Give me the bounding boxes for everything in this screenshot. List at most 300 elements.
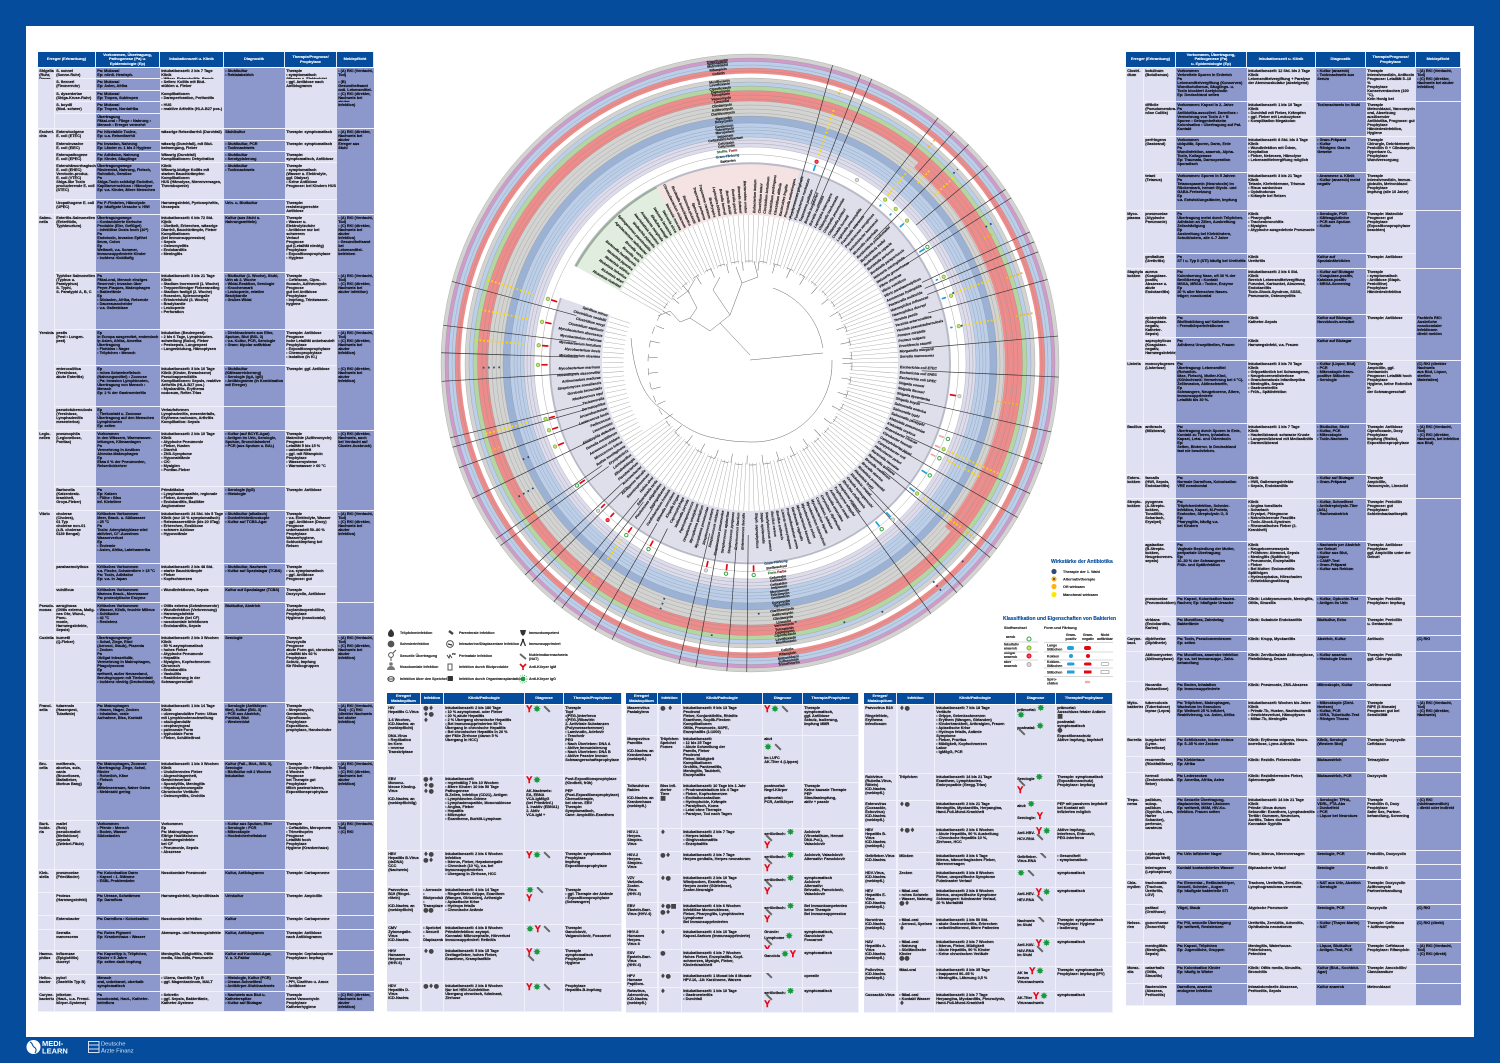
- row: Streptokokken agalactiae: Prophylaxe: [1367, 547, 1388, 551]
- species labels: left half: Aggregatibacter: [648, 485, 667, 511]
- row: Salmonella Typhi: • Südasien, Afrika, Reisende: [97, 298, 148, 302]
- row: Enteropathogene E. coli: Therapie:: [286, 153, 303, 157]
- species labels: right half: Klebsiella pneumoniae: [889, 416, 925, 434]
- row: Streptokokken pyogenes: Schleimhautantiseptik: [1367, 512, 1408, 516]
- row: Salmonella Typhi: Tod): [338, 278, 346, 282]
- row: Helicobacter: [38, 975, 374, 992]
- row: Mumpsvirus: Im LUFC: [764, 756, 780, 760]
- species labels: right half: Fusobacterium nucleatum: [793, 178, 811, 221]
- row: HSV-1: DNA-Pol.),: [804, 838, 823, 842]
- ring labels: bottom: Tigecyclin: [773, 602, 790, 608]
- row: Shigella: Inkubationszeit: 2 bis 7 Tage: [161, 69, 213, 73]
- species labels: left half: Erysipelothrix: [608, 448, 630, 466]
- row: Clostridium botulinum: Wundbotulismus, Säuglings- u.: [1177, 85, 1234, 89]
- row: Burkholderia: Hygiene (Krankenhaus): [286, 846, 329, 850]
- row: HIV: PEG: [565, 738, 573, 742]
- row: Borrelia hermsii: [1126, 773, 1461, 797]
- row: HDV Virus: symptomatisch: [1057, 871, 1085, 875]
- row: Clostridium botulinum: Therapie: [1367, 69, 1383, 73]
- row: Parvovirus: Inkubationszeit: 4 bis 14 Tage: [445, 888, 499, 892]
- row: Burkholderia: Vorkommen: [161, 822, 183, 826]
- row: Enterotoxigene E. coli: • (A) RKI (direkter,: [338, 130, 371, 134]
- row: Streptokokken agalactiae: • Neugeborenensepsis: [1248, 547, 1289, 551]
- row: Salmonella Typhi: • Bakteriämie: [97, 290, 121, 294]
- species labels: right half: Moraxella catarrhalis: [852, 228, 879, 256]
- row: HBV Hepatitis: Aktive Impfung,: [1057, 828, 1086, 832]
- species labels: left half: Rickettsia japonica: [606, 249, 634, 271]
- row: Vibrio cholerae: 01 Typ: [56, 520, 68, 524]
- table header: Klinik/Pathologie: [959, 695, 991, 700]
- species labels: left half: [557, 181, 748, 556]
- row: HIV: (meldepflicht): [388, 726, 413, 730]
- row: Streptokokken agalactiae: • Kultur aus Blut,: [1317, 551, 1348, 555]
- row: Haemophilus: Ep: selten dank Impfung: [97, 960, 141, 964]
- row: Borrelien: borreliose, Lyme-Arthritis: [1248, 742, 1294, 746]
- row: EBV: Chemotherapie,: [565, 797, 594, 801]
- species labels: right half: Staph. epidermidis: [759, 512, 766, 544]
- row: Neisserien meningitidis: • Antigen-Test, PCR: [1317, 948, 1352, 952]
- row: Masernvirus: ● ♦: [660, 705, 673, 712]
- row: Yersinia pestis: • 2 bis 6 Tage, Lymphknoten-: [161, 335, 213, 339]
- species labels: left half: Aerococcus viridans: [588, 435, 621, 457]
- row: Streptokokken pyogenes: • Erysipel, Phlegmone: [1248, 512, 1288, 516]
- species labels: right half: Haemophilus influenzae: [890, 295, 929, 313]
- row: Bacillus: • Lungenmilzbrand mit Mediastinitis: [1248, 437, 1313, 441]
- row: Francisella: • okuloglandulär: [161, 720, 191, 724]
- form and staining column: Kokken-: [1047, 660, 1060, 664]
- row: Salmonella Typhi: S. Paratyphi A, B, C: [56, 290, 92, 294]
- row: Clostridium tetani: tetani: [1145, 174, 1155, 178]
- row: Enteroinvasive E. coli: • Toxinnachweis: [225, 146, 255, 150]
- row: Mykobakterien tuberculosis: • IGRA, Tuberkulin-Test: [1317, 713, 1359, 717]
- row: Legionella: Pa: [97, 444, 102, 448]
- row: Rubivirus: Tröpfchen: [899, 775, 918, 779]
- row: Aktinomyceten: [1126, 652, 1461, 682]
- row: Clostridium perfringens: ubiquitär, Sporen, Darm, Erde: [1177, 142, 1231, 146]
- row: Francisella: Klinik: [161, 708, 172, 712]
- row: HDV Hepatitis D: Übergang chronisch, fulminant,: [445, 992, 502, 996]
- row: Corynebacterium: Katheterspitze: [225, 997, 251, 1001]
- form and staining column: Spiro-: [1047, 678, 1057, 682]
- row: Pseudomonas aeruginosa: • Wundinfektion (Verbrennung): [161, 608, 217, 612]
- row: Enteropathogene E. coli: • Stuhlkultur: [225, 153, 248, 157]
- row: HIV: • Aktive Passive Immun: [565, 754, 608, 758]
- row: Corynebacterium: • ggf. Sepsis, Bakteriämie,: [161, 997, 209, 1001]
- row: Yersinia enterocolitica: • Myokarditis, Erythema: [161, 387, 204, 391]
- row: Clostridium perfringens: Chirurgie, Debridement: [1367, 142, 1409, 146]
- row: Tollwutvirus: ■: [660, 795, 666, 802]
- row: Uropathogene E. coli: Ep: häufigste Ursache v. HWI: [97, 205, 150, 209]
- row: Vibrio cholerae: Nachweis bei akuter: [338, 524, 362, 532]
- row: Treponema: infektion. Frauen selten: [1177, 810, 1220, 814]
- row: Shigella flexneri: [38, 79, 374, 91]
- row: Norovirus: Nachweis: [1017, 919, 1035, 923]
- row: Neisserien meningitidis: • (C) RKI (direkt): [1417, 952, 1446, 956]
- row: Staphylokokken saprophyticus: (Koagulase-: [1145, 343, 1167, 347]
- row: Treponema: • (C) RKI (nichtnamentlich): [1417, 798, 1449, 806]
- row: Corynebacterium: Nachweis bei akuter: [338, 997, 362, 1005]
- row: Enterobacter: Pa: Darmflora • Kolonisation: [97, 917, 149, 921]
- icon: antibody IgG: [519, 675, 556, 683]
- species labels: left half: Rickettsia rickettsii: [592, 269, 622, 289]
- row: Bartonella: krankheit,: [56, 496, 74, 500]
- row: HSV-1: • Herpes labialis: [683, 834, 712, 838]
- row: Yersinia pestis: Ep: [97, 331, 102, 335]
- species labels: right half: Vibrio cholerae: [878, 273, 902, 289]
- ring labels: bottom: Imipenem: [771, 584, 787, 590]
- row: Yersinia enterocolitica: Nachweis bei akuter: [338, 371, 362, 379]
- row: HBV: ●♦: [423, 857, 434, 864]
- row: Yersinia pestis: • v.a. Kultur, PCR, Serologie: [225, 339, 275, 343]
- row: VZV: Windpocken, Exanthem,: [683, 880, 727, 884]
- row: Vibrio parahaemolyticus: • Kopfschmerzen: [161, 577, 192, 581]
- row: VZV: [626, 875, 859, 903]
- icon: nosocomial infection: [387, 662, 438, 670]
- row: Parvovirus B19: Aktive Impfung, Impfstoff: [1057, 738, 1103, 742]
- row: Mumpsvirus: [626, 736, 859, 783]
- row: EBV: EBV: [388, 777, 396, 781]
- row: EBV: Post-Expositionsprophylaxe: [565, 777, 616, 781]
- row: Brucella: (Brucellosen,: [56, 774, 80, 778]
- ring labels: bottom: Gentamicin: [771, 594, 790, 600]
- row: Treponema: Sekundär: Exanthem, Lymphadenitis: [1248, 810, 1315, 814]
- row: Bacillus: Impfung (Risiko),: [1367, 437, 1398, 441]
- row: Burkholderia: • Abszesse: [161, 850, 181, 854]
- row: Klebsiella: [38, 870, 374, 893]
- wordmark: LEARN: [42, 1046, 68, 1056]
- ring labels: bottom: Rifampicin: [779, 650, 797, 657]
- species labels: left half: Gemella morbillorum: [585, 431, 618, 451]
- row: Clostridium perfringens: Ep: Traumata, Darmoperation: [1177, 158, 1230, 162]
- ring labels: top: Gram-Färbung: [716, 153, 739, 159]
- row: Yersinia pestis: in Asien, Afrika, Amerika: [97, 339, 142, 343]
- row: Aktinomyceten: • Kultur anaerob: [1317, 653, 1347, 657]
- row: Enterohämorrhagische E. coli: Rindermist, Nahrung, Fleisch,: [97, 168, 151, 172]
- row: Brucella: cella: [39, 766, 48, 770]
- row: Mycoplasma pneumoniae: Ausbreitung bei Kleinkindern,: [1177, 232, 1231, 236]
- row: Parvovirus: • Expositionsprophylaxe: [565, 896, 609, 900]
- species labels: right half: Shigella flexneri: [898, 386, 926, 395]
- row: Treponema: nema: [1127, 802, 1137, 806]
- row: Bacteroides: Metronidazol: [1367, 985, 1391, 989]
- species labels: left half: Ehrlichia ewingii: [650, 214, 669, 240]
- row: Neisserien meningitidis: meningitidis: [1145, 944, 1168, 948]
- row: Coxiella burnetii: Inkubationszeit: 2 bis 3 Wochen: [161, 636, 219, 640]
- row: Bacillus: Kapsel, Letal- und Ödemtoxin: [1177, 437, 1231, 441]
- ring labels: top: Cefotaxim: [718, 140, 735, 146]
- row: Moraxella: Clavulansäure: [1367, 970, 1393, 974]
- row: Vibrio cholerae: Pa: [97, 524, 102, 528]
- row: HHV-6: HHV: [388, 949, 396, 953]
- row: HSV-1: (Virostatikum, Hemmt: [804, 834, 843, 838]
- row: Neisserien meningitidis: • Liquor, Blutkultur: [1317, 944, 1351, 948]
- row: Enteropathogene E. coli: • Serotypisierung: [225, 157, 256, 161]
- row: Salmonella enterica: (bei Immunsuppression): [161, 236, 205, 240]
- row: Treponema: Therapie: [1367, 798, 1383, 802]
- row: Legionella: • Fieber, Husten: [161, 444, 190, 448]
- row: Mycoplasma pneumoniae: Übertragung meist durch Tröpfchen.: [1177, 216, 1243, 220]
- row: Parvovirus: • ggf. Therapie der Anämie: [565, 892, 613, 896]
- row: Streptokokken pyogenes: • Angina tonsillaris: [1248, 504, 1282, 508]
- row: HDV Virus: (meldepfl.): [865, 879, 884, 883]
- row: Staphylokokken aureus: • Antibiose (Staph-Penicilline): [1367, 278, 1401, 286]
- row: Parvovirus: röteln): [388, 896, 400, 900]
- logo: MEDI-LEARN: [26, 1039, 68, 1056]
- row: Chlamydien trachomatis: • Serologie: [1317, 885, 1337, 889]
- row: EBV: VCA-IgM +: [526, 813, 545, 817]
- row: Parvovirus B19: • Erythem (Wangen, Girlanden): [936, 718, 992, 722]
- ring labels: bottom: Ciprofloxacin: [774, 631, 796, 638]
- species labels: right half: Gardnerella vaginalis: [790, 506, 804, 542]
- ring labels: top: Clarithromycin: [711, 110, 735, 117]
- row: Clostridium tetani: Impfung (alle 10 Jahre): [1367, 190, 1409, 194]
- row: Parvovirus B19: • Grippe, Gelenkschmerzen: [936, 714, 985, 718]
- row: Treponema: Tertiär: Gummen, Neurolues,: [1248, 814, 1300, 818]
- row: Tollwutvirus: zierter Tiere: [660, 788, 672, 796]
- row: Francisella: prophylaxe, Handschuhe: [286, 728, 331, 732]
- row: Listeria: • Kultur (Liquor, Blut): [1317, 362, 1355, 366]
- row: HBV: • Chronisch (10 %), v.a. bei: [445, 864, 493, 868]
- row: Streptokokken agalactiae: • Frühform: Atemnot, Sepsis: [1248, 551, 1299, 555]
- row: Streptokokken pyogenes: (ASL): [1317, 508, 1327, 512]
- row: Clostridium tetani: Inkubationszeit: 3 bis 21 Tage: [1248, 174, 1302, 178]
- row: Brucella: Prophylaxe: [286, 782, 307, 786]
- row: HBV: • Übergang in Zirrhose, HCC: [445, 872, 496, 876]
- row: Staphylokokken aureus: Furunkel, Karbunkel, Abszesse,: [1248, 282, 1305, 286]
- row: Francisella: • ulzeroglanduläre Form: Ulkus: [161, 712, 217, 716]
- row: CMV: Inkubationszeit: 4 bis 8 Wochen: [445, 926, 503, 930]
- row: HAV: HAV: [865, 940, 873, 944]
- table header: Diagnose: [1027, 695, 1044, 700]
- row: Leptospira interrogans: Biphasischer Verlauf: [1248, 866, 1286, 870]
- row: Borrelia recurrentis: (Rückfallfieber): [1145, 762, 1173, 766]
- row: Pseudomonas aeruginosa: monas: [39, 608, 51, 612]
- row: Vibrio parahaemolyticus: • starke Bauchkrämpfe: [161, 569, 202, 573]
- row: Enterokokken: (HWI, Sepsis,: [1145, 480, 1169, 484]
- row: Mykobakterien tuberculosis: Prognose: gut bei: [1367, 709, 1399, 713]
- row: Corynebacterium diphtheriae: diphtheriae: [1145, 637, 1166, 641]
- icon: sexual transmission: [389, 650, 437, 661]
- row: Enterohämorrhagische E. coli: Pa: [97, 176, 102, 180]
- row: Salmonella enterica: Kultur (aus Stuhl u. Nahrungsmitteln): [225, 216, 260, 224]
- row: Rotavirus: Adenovirus,: [627, 993, 649, 997]
- row: Tollwutvirus: PEP: [804, 792, 812, 796]
- row: Streptokokken agalactiae: sepsis): [1145, 559, 1158, 563]
- row: Proteus: Urinkultur: [225, 894, 243, 898]
- row: VZV: Virus: [627, 888, 637, 892]
- row: Clostridium tetani: Pa: [1177, 178, 1182, 182]
- row: Chlamydophila psittaci: psittaci: [1145, 906, 1158, 910]
- row: Bacillus: [1126, 424, 1461, 475]
- row: Helicobacter: bacter: [39, 980, 51, 984]
- species labels: left half: Bordetella bronchiseptica: [671, 185, 692, 226]
- row: Staphylokokken saprophyticus: Adhärenz Uroepithelien, Frauen: [1177, 343, 1235, 347]
- row: Bartonella: Oroya-Fieber): [56, 500, 81, 504]
- row: Moraxella: Therapie: Amoxicillin/: [1367, 966, 1407, 970]
- row: Clostridium tetani: Tetanospasmin (Neurotoxin) im: [1177, 182, 1234, 186]
- table header: Infektion: [424, 695, 440, 700]
- row: HBV: Infektion: [445, 856, 461, 860]
- row: Coxiella burnetii: Phagolysosom: [97, 664, 124, 668]
- row: Haemophilus: media, Sinusitis, Pneumonie: [161, 956, 213, 960]
- row: Treponema: (Syphilis, Lues,: [1145, 810, 1173, 814]
- row: Francisella: Tod) • (C) RKI: [338, 708, 362, 712]
- row: Bartonella: • Flöhe • Biss: [97, 496, 121, 500]
- row: Clostridium perfringens: Prophylaxe: [1367, 154, 1388, 158]
- row: Legionella: • CK↑: [161, 460, 171, 464]
- row: Clostridium tetani: Tetanie, Kieferklemme, Trismus: [1248, 182, 1305, 186]
- row: Pseudomonas aeruginosa: • Endokarditis, Sepsis: [161, 624, 201, 628]
- row: Mykobakterien tuberculosis: tuberculosis: [1145, 701, 1168, 705]
- row: Serratia: Atemwegs- und Harnwegsinfekte: [161, 931, 221, 935]
- row: Treponema: Aortitis, Tabes dorsalis: [1248, 818, 1290, 822]
- row: Staphylokokken saprophyticus: negativ,: [1145, 347, 1159, 351]
- row: Staphylokokken aureus: Endokarditis): [1145, 290, 1169, 294]
- row: EBV: (meldepflichtig): [388, 801, 416, 805]
- row: Moraxella: Pa: Kolonisation Kinder: [1177, 966, 1220, 970]
- row: Borrelien: (Lyme-Borreliose): [1145, 742, 1165, 750]
- row: Vibrio cholerae: Ep: [97, 540, 102, 544]
- ring labels: top: Doxycyclin: [715, 118, 733, 124]
- chart: circular phylogenetic tree with antibiotic rings: [441, 54, 1059, 672]
- row: Corynebacterium: Therapie: [286, 993, 302, 997]
- row: Mykobakterien tuberculosis: Myko-: [1127, 701, 1138, 705]
- row: Streptokokken agalactiae: peripartale Übertragung: [1177, 551, 1220, 555]
- row: Mykobakterien tuberculosis: Ep: Weltweit 25 % infiziert,: [1177, 709, 1225, 713]
- icon: immunocompetent: [520, 630, 560, 636]
- icon: immunosuppressed: [520, 639, 561, 646]
- row: Klebsiella: Pa: Kolonisation Darm: [97, 871, 138, 875]
- row: Clostridium perfringens: Therapie: [1367, 138, 1383, 142]
- species labels: left half: Mycobacterium bovis: [565, 347, 601, 354]
- row: Treponema: carateum: [1145, 826, 1162, 830]
- row: Nocardia: (Nokardiose): [1145, 687, 1168, 691]
- species labels: left half: Kingella kingae: [665, 494, 680, 519]
- row: Yersinia pestis: schwellung (Bubo), Fieber: [161, 339, 209, 343]
- species labels: right half: Orientia tsutsugamushi: [846, 476, 875, 509]
- row: Clostridium perfringens: • Gram-Präparat: [1317, 138, 1346, 142]
- row: Francisella: Gentamicin,: [286, 712, 308, 716]
- row: Burkholderia: • Pferde • Mensch: [97, 826, 129, 830]
- row: Vibrio cholerae: cholerae non-01: [56, 524, 85, 528]
- row: Borrelia hermsii: Splenomegalie: [1248, 778, 1275, 782]
- ring labels: top: Levofloxacin: [709, 82, 730, 88]
- row: Enteroinvasive E. coli: Therapie: symptomatisch: [286, 142, 332, 146]
- row: Streptokokken pyogenes: Klinik: [1248, 500, 1259, 504]
- row: Enterohämorrhagische E. coli: Komplikationen: [161, 176, 190, 180]
- row: Brucella: • Rohmilch, Käse: [97, 774, 128, 778]
- row: HHV-6: Hygiene: [565, 961, 580, 965]
- row: Borrelia hermsii: Pa: Lederzecken: [1177, 774, 1207, 778]
- row: HSV-1: Aciclovir: [804, 830, 820, 834]
- row: Listeria: Materialien): [1417, 378, 1438, 382]
- row: Coxsackie-Virus: ♦: [899, 1000, 905, 1007]
- row: ESV: Kinderkrankheit: [683, 963, 712, 967]
- table header: Erreger/ Malakopilium: [868, 693, 892, 702]
- row: Francisella: Therapie: [286, 704, 302, 708]
- table header: Klinik/Pathologie: [706, 695, 738, 700]
- row: Enterobacter: Enterobacter: [56, 917, 80, 921]
- row: Listeria: monocytogenes: [1145, 362, 1174, 366]
- row: HIV: • Tenofovir: [565, 734, 585, 738]
- row: Francisella: Ciprofloxacin: [286, 716, 310, 720]
- row: EBV: • Hepatitis: [445, 809, 464, 813]
- row: EBV HHV-4: ●♦: [660, 909, 671, 916]
- row: EBV: Inkubationszeit:: [445, 777, 474, 781]
- ring labels: bottom: Doxycyclin: [772, 599, 790, 605]
- row: HHV-8: Virus 8: [627, 942, 640, 946]
- row: Burkholderia: Tod): [338, 826, 346, 830]
- row: Salmonella Typhi: Ep: [97, 294, 102, 298]
- row: Staphylokokken aureus: Händedesinfektion: [1367, 290, 1401, 294]
- row: Yersinia enterocolitica: nodosum, Reiter-Trias: [161, 391, 201, 395]
- row: Legionella: • Myalgien: [161, 464, 180, 468]
- species labels: left half: Leptospira biflexa: [712, 186, 722, 217]
- row: Clostridium perfringens: Klinik: [1248, 142, 1259, 146]
- row: Pseudomonas aeruginosa: Kritisches Vorkommen: [97, 604, 138, 608]
- row: Yersinia enterocolitica: Übertragung von Mensch •: [97, 383, 145, 387]
- row: Vibrio cholerae: Prognose: [286, 524, 304, 528]
- row: Clostridium botulinum: Infektion): [1417, 85, 1434, 89]
- row: Yersinia pestis: Nachweis bei akuter: [338, 343, 362, 351]
- row: Listeria: positive Stäbchen: [1317, 374, 1350, 378]
- row: Staphylokokken saprophyticus: Harnwegsinfekte): [1145, 351, 1176, 355]
- row: Vibrio cholerae: Inkubationszeit: 24 Std. bis 5 Tage: [161, 512, 223, 516]
- row: Clostridium perfringens: Hyperbare O₂: [1367, 150, 1392, 154]
- row: Listeria: Pa:: [1177, 362, 1183, 366]
- row: Yersinia enterocolitica: Ep: [97, 367, 102, 371]
- row: Norovirus: (meldepfl.): [865, 926, 884, 930]
- icon: sexual transmission: Sexuelle Übertragung: [400, 653, 437, 658]
- row: Haemophilus: V- u. X-Faktor: [225, 956, 250, 960]
- row: Streptokokken agalactiae: • Bei Mutter: Endometritis: [1248, 567, 1295, 571]
- row: Listeria: • Granulomatosis infantiseptica: [1248, 378, 1305, 382]
- row: ESV: Epstein-Barr-: [627, 955, 651, 959]
- row: Francisella: Infektion): [338, 720, 355, 724]
- row: Yersinia pestis: [38, 330, 374, 366]
- row: Parvovirus B19: Ringelröteln,: [865, 714, 888, 718]
- row: Clostridium botulinum: Vorkommen: [1177, 69, 1199, 73]
- icon: nosocomial infection: Nosokomiale Infektion: [400, 665, 438, 669]
- antibiotic spokes: [441, 65, 1059, 672]
- row: Shigella Übertragung: [38, 114, 374, 129]
- row: Enterohämorrhagische E. coli: • Keine Antibiose: [286, 180, 317, 184]
- row: Salmonella Typhi: Paratyphus): [56, 282, 78, 286]
- row: EBV: • ältere Kinder: 10 bis 50 Tage: [445, 785, 499, 789]
- row: Clostridium botulinum: Clostri-: [1127, 69, 1140, 73]
- row: Mykobakterien tuberculosis: Klinik: [1248, 705, 1259, 709]
- row: Klebsiella: • ESBL Problemkeim: [97, 879, 135, 883]
- species labels: right half: Bordetella pertussis: [866, 248, 895, 271]
- row: Salmonella enterica: Diarrhö, Bauchkrämpfe, Fieber: [161, 228, 217, 232]
- species labels: left half: Clostridium novyi: [576, 317, 606, 328]
- ring labels: bottom: Sulfonamide: [778, 657, 799, 664]
- row: Leptospira interrogans: [1126, 865, 1461, 880]
- row: Vibrio parahaemolyticus: Ep: v.a. in Japan: [97, 577, 127, 581]
- row: Legionella: • Warmwasser > 60 °C: [286, 464, 326, 468]
- icon: smear infection: [388, 641, 429, 647]
- row: Staphylokokken aureus: Inkubationszeit: 2 bis 6 Std.: [1248, 270, 1298, 274]
- row: HSV-2: Y: [764, 863, 770, 873]
- row: Legionella: • unbehandelt: [286, 448, 311, 452]
- row: Staphylokokken epidermidis: Therapie: Antibiose: [1367, 316, 1402, 320]
- row: Streptokokken pyogenes: • Antistreptolysin-Titer: [1317, 504, 1358, 508]
- ring labels: bottom: Clindamycin: [773, 615, 793, 621]
- row: Yersinia pseudotuberculosis: Lymphadenitis: [56, 416, 83, 420]
- row: Burkholderia: • Serologie • PCR: [225, 826, 256, 830]
- row: Treponema: Inkubationszeit: 14 bis 21 Tage: [1248, 798, 1304, 802]
- row: Burkholderia: Burk-: [39, 822, 49, 826]
